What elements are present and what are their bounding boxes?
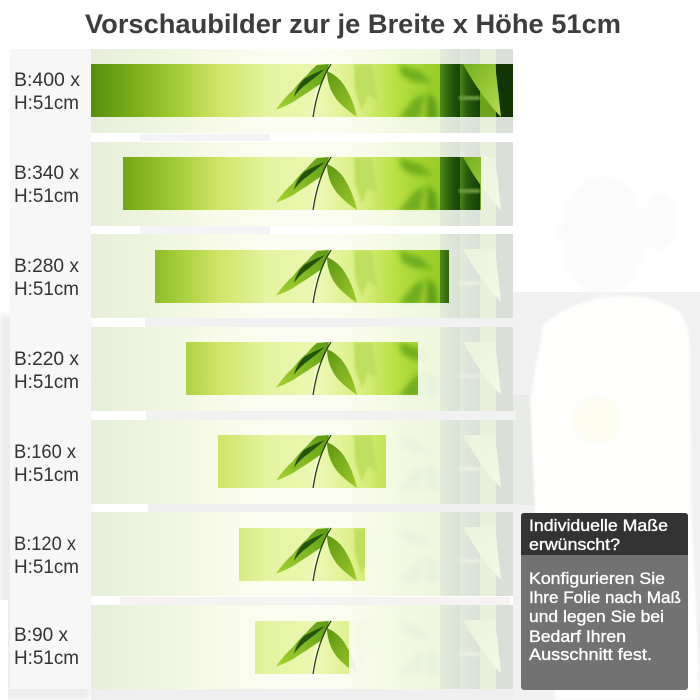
- callout: individual sizes: Bedarf Ihren: [529, 628, 626, 646]
- callout: individual sizes: und legen Sie bei: [529, 608, 664, 626]
- callout: individual sizes: Ausschnitt fest.: [529, 646, 652, 664]
- row: B:160 x H:51cm: [14, 420, 513, 504]
- row: B:340 x H:51cm: H:51cm: [14, 185, 79, 207]
- row: B:340 x H:51cm: B:340 x: [14, 162, 79, 184]
- row: B:90 x H:51cm: B:90 x: [14, 624, 68, 646]
- row: B:280 x H:51cm: H:51cm: [14, 278, 79, 300]
- row: B:120 x H:51cm: [14, 512, 513, 597]
- title: Vorschaubilder zur je Breite x Höhe 51cm: [85, 9, 621, 39]
- row: B:160 x H:51cm: B:160 x: [14, 441, 76, 463]
- callout: individual sizes: Individuelle Maße: [529, 517, 668, 535]
- row: B:220 x H:51cm: [14, 327, 513, 411]
- row: B:340 x H:51cm: [14, 142, 513, 226]
- row: B:120 x H:51cm: B:120 x: [14, 533, 76, 555]
- callout: individual sizes: Ihre Folie nach Maß: [529, 589, 681, 607]
- row: B:220 x H:51cm: B:220 x: [14, 348, 79, 370]
- callout: individual sizes: Konfigurieren Sie: [529, 570, 665, 588]
- row: B:400 x H:51cm: B:400 x: [14, 69, 80, 91]
- label column: [10, 49, 91, 689]
- row: B:220 x H:51cm: H:51cm: [14, 371, 79, 393]
- row: B:90 x H:51cm: H:51cm: [14, 647, 79, 669]
- row: B:400 x H:51cm: H:51cm: [14, 92, 79, 114]
- row: B:280 x H:51cm: B:280 x: [14, 255, 79, 277]
- row: B:280 x H:51cm: [14, 234, 513, 319]
- callout: individual sizes: [521, 513, 688, 690]
- row: B:400 x H:51cm: [14, 49, 513, 133]
- callout: individual sizes: erwünscht?: [529, 536, 620, 554]
- row: B:120 x H:51cm: H:51cm: [14, 556, 79, 578]
- row: B:90 x H:51cm: [14, 605, 513, 690]
- row: B:160 x H:51cm: H:51cm: [14, 464, 79, 486]
